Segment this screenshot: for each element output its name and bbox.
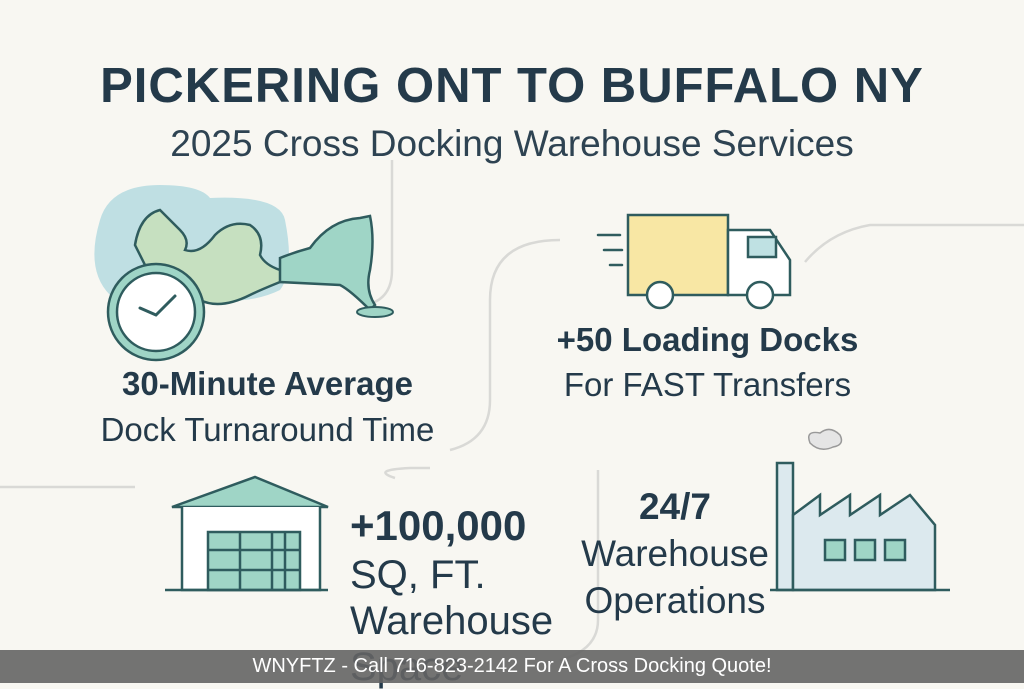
text: 30-minute: 30-Minute Average xyxy=(122,365,413,402)
footer banner: WNYFTZ - Call 716-823-2142 For A Cross Docking Quote! xyxy=(252,655,772,677)
text: 24/7: 24/7 xyxy=(639,486,711,527)
footer banner xyxy=(0,650,1024,683)
text: For FAST Transfers xyxy=(564,366,851,403)
icon: map with clock xyxy=(94,185,394,362)
icon: warehouse xyxy=(165,476,328,592)
text: Space xyxy=(350,645,463,689)
icon: factory xyxy=(770,428,950,592)
subtitle: 2025 Cross Docking Warehouse Services xyxy=(170,123,854,164)
title: PICKERING ONT TO BUFFALO NY xyxy=(100,59,924,113)
text: Warehouse xyxy=(581,533,769,574)
icon: truck xyxy=(596,214,792,310)
text: Warehouse xyxy=(350,599,553,643)
text: Operations xyxy=(584,580,766,621)
text: sq ft: +100,000 xyxy=(350,502,526,549)
text: SQ, FT. xyxy=(350,553,486,597)
text: loading docks: +50 Loading Docks xyxy=(557,321,858,358)
text: Dock Turnaround Time xyxy=(101,411,434,448)
